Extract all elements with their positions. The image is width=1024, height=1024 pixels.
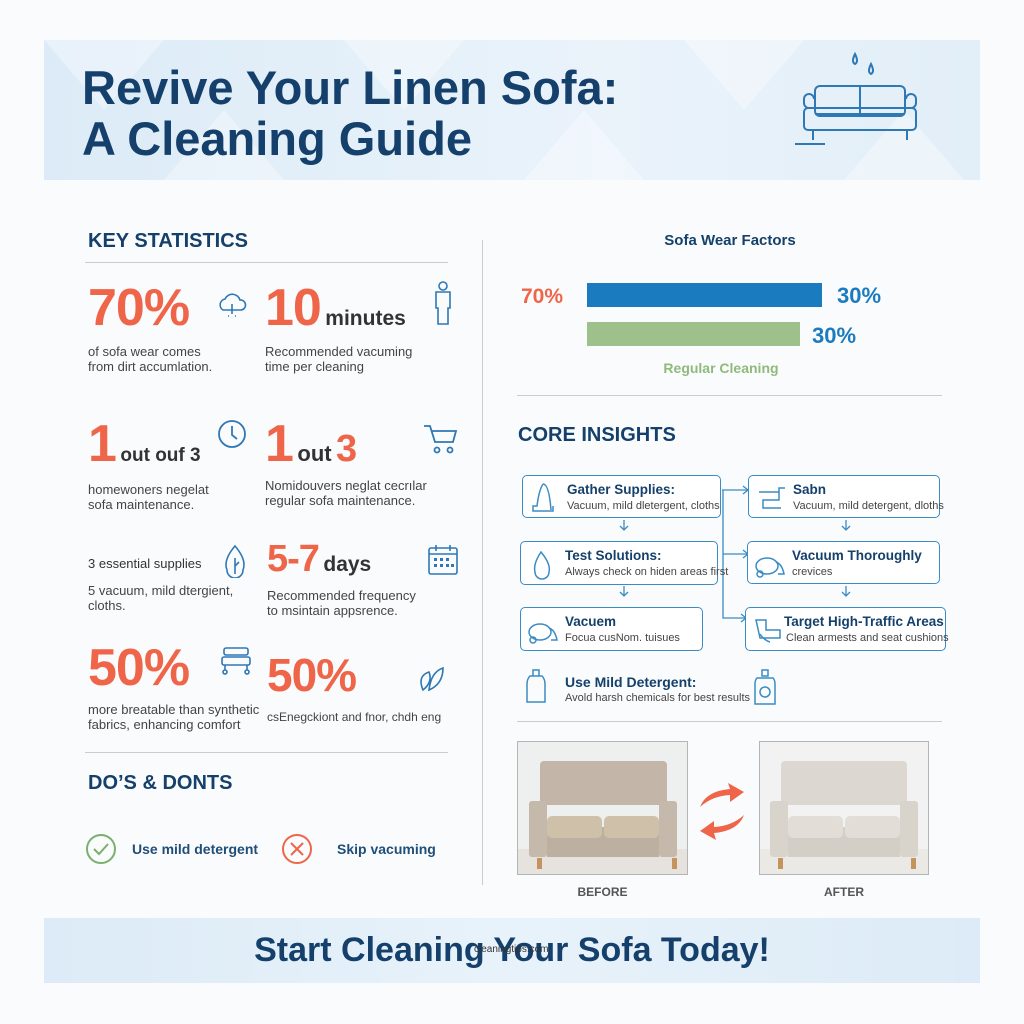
box: vacuum thoroughly: crevices — [792, 566, 832, 578]
chart: sofa wear factors — [521, 232, 881, 376]
chart: sofa wear factors: 30% — [812, 323, 856, 348]
box: sabn — [748, 475, 940, 518]
heading: KEY STATISTICS — [88, 230, 248, 252]
stat: 50% breathable: more breatable than synthetic — [88, 702, 259, 717]
do item — [86, 834, 258, 864]
dont item — [282, 834, 436, 864]
box: test solutions: Always check on hiden areas first — [565, 566, 728, 578]
box: test solutions: Test Solutions: — [565, 548, 662, 563]
icon: sofa cart — [221, 647, 251, 675]
photo: after — [759, 741, 929, 899]
box: target high-traffic areas: Clean armests and seat cushions — [786, 632, 949, 644]
stat: 50%: 50% — [267, 649, 356, 701]
header band — [44, 40, 980, 180]
footer banner: Start Cleaning Your Sofa Today! — [254, 931, 770, 969]
stat: 50% breathable: 50% — [88, 639, 189, 697]
icon: leaves — [420, 666, 444, 692]
box: sabn: Sabn — [793, 482, 826, 497]
icon: detergent bottle — [754, 669, 776, 705]
icon: leaf drop — [225, 544, 245, 578]
box: sabn: Vacuum, mild detergent, dloths — [793, 500, 944, 512]
box: gather supplies: Gather Supplies: — [567, 482, 675, 497]
panel: do's and donts — [86, 772, 436, 864]
box: gather supplies: Vacuum, mild dletergent, cloths — [567, 500, 720, 512]
chart: sofa wear factors: Sofa Wear Factors — [664, 232, 796, 249]
footer banner: cleaningtips.com — [474, 944, 548, 955]
stat: 1 out 3: regular sofa maintenance. — [265, 493, 415, 508]
panel: core insights — [518, 424, 949, 705]
stat: 5-7 days: to msintain appsrence. — [267, 603, 398, 618]
box: target high-traffic areas — [745, 607, 946, 651]
connectors — [620, 486, 850, 622]
heading: DO’S & DONTS — [88, 772, 232, 794]
title — [82, 61, 618, 165]
stat: 1 out of 3 — [88, 415, 209, 512]
stat: 5-7 days — [267, 538, 416, 618]
icon: swap arrows — [700, 783, 744, 840]
stat: 10 minutes — [265, 279, 412, 374]
stat: 1 out of 3: 1 out ouf 3 — [88, 415, 201, 473]
icon: cloud — [219, 293, 246, 317]
box: vacuum: Focua cusNom. tuisues — [565, 632, 680, 644]
chart: sofa wear factors: 30% — [837, 283, 881, 308]
icon: cart — [424, 425, 458, 454]
stat: 50%: csEnegckiont and fnor, chdh eng — [267, 710, 441, 724]
photo: before: BEFORE — [577, 885, 628, 899]
stat: 50% breathable — [88, 639, 259, 732]
box: vacuum thoroughly — [747, 541, 940, 584]
stat: 1 out 3: Nomidouvers neglat cecrılar — [265, 478, 427, 493]
box: vacuum — [520, 607, 703, 651]
stat: 1 out 3 — [265, 415, 427, 508]
stat: 50% — [267, 649, 441, 724]
stat: 10 minutes: time per cleaning — [265, 359, 364, 374]
title: Revive Your Linen Sofa: — [82, 61, 618, 114]
icon: sofa with drops — [795, 52, 917, 145]
icon: calendar — [428, 545, 458, 575]
stat: 3 essential supplies: 5 vacuum, mild dtergient, — [88, 583, 233, 598]
insight: use mild detergent — [526, 669, 750, 704]
photo: after: AFTER — [824, 885, 864, 899]
stat: 70%: of sofa wear comes — [88, 344, 201, 359]
stat: 70%: 70% — [88, 279, 189, 337]
box: target high-traffic areas: Target High-Traffic Areas — [784, 614, 944, 629]
insight: use mild detergent: Avold harsh chemicals for best results — [565, 692, 750, 704]
stat: 10 minutes: 10 minutes — [265, 279, 406, 337]
box: test solutions — [520, 541, 718, 585]
stat: 1 out 3: 1 out 3 — [265, 415, 356, 473]
stat: 3 essential supplies: cloths. — [88, 598, 126, 613]
chart: sofa wear factors: Regular Cleaning — [663, 360, 779, 376]
panel: key statistics — [85, 230, 458, 732]
stat: 3 essential supplies: 3 essential supplies — [88, 556, 201, 571]
photo: before — [517, 741, 688, 899]
box: gather supplies — [522, 475, 721, 518]
panel: core insights: CORE INSIGHTS — [518, 424, 676, 446]
stat: 70% — [88, 279, 212, 374]
stat: 10 minutes: Recommended vacuming — [265, 344, 412, 359]
stat: 5-7 days: 5-7 days — [267, 538, 371, 580]
footer banner — [44, 918, 980, 983]
stat: 3 essential supplies — [88, 556, 233, 613]
chart: sofa wear factors: 70% — [521, 285, 563, 308]
title: A Cleaning Guide — [82, 112, 472, 165]
box: vacuum thoroughly: Vacuum Thoroughly — [792, 548, 922, 563]
stat: 5-7 days: Recommended frequency — [267, 588, 416, 603]
stat: 1 out of 3: homewoners negelat — [88, 482, 209, 497]
stat: 50% breathable: fabrics, enhancing comfort — [88, 717, 240, 732]
icon: person — [435, 281, 451, 325]
stat: 70%: from dirt accumlation. — [88, 359, 212, 374]
box: vacuum: Vacuem — [565, 614, 616, 629]
stat: 1 out of 3: sofa maintenance. — [88, 497, 194, 512]
do item: Use mild detergent — [132, 841, 258, 857]
dont item: Skip vacuming — [337, 841, 436, 857]
insight: use mild detergent: Use Mild Detergent: — [565, 674, 696, 690]
icon: clock — [218, 420, 246, 448]
